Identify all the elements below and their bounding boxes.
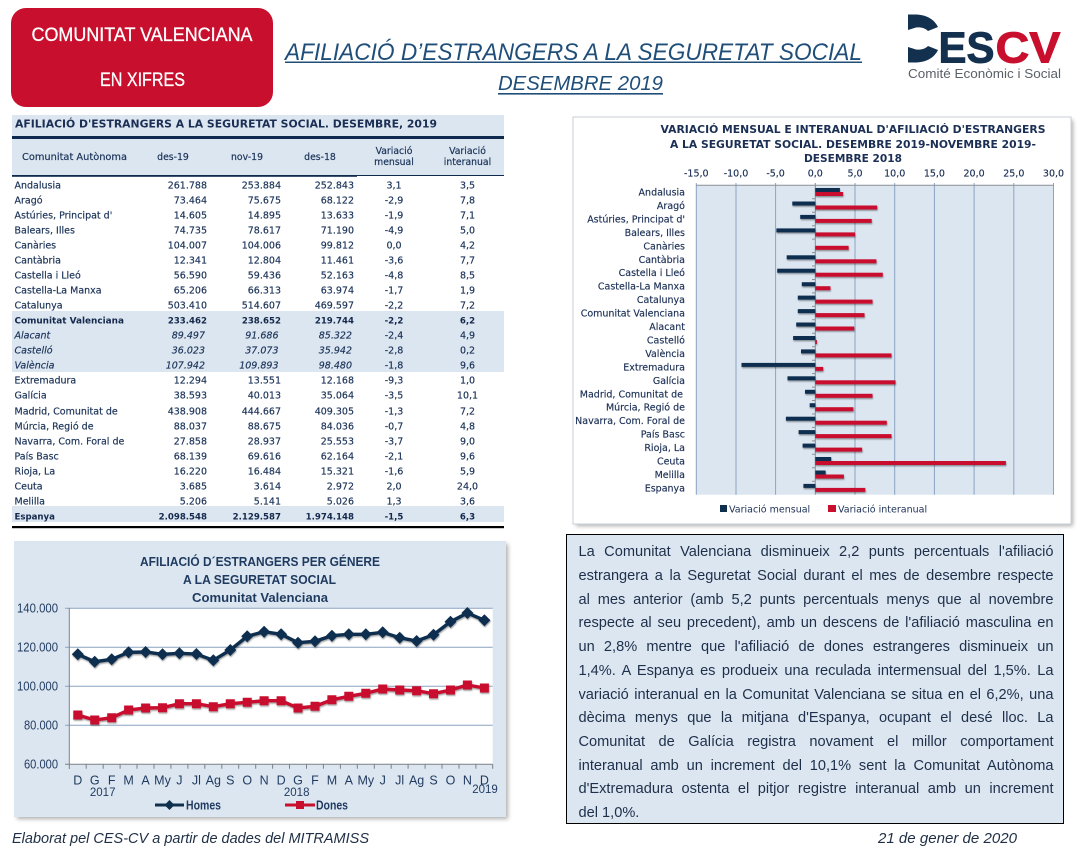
table rows: -2,4 bbox=[385, 330, 403, 342]
bar chart category labels: País Basc bbox=[641, 430, 685, 441]
bar chart title: A LA SEGURETAT SOCIAL. DESEMBRE 2019-NOVEMBRE 2019- bbox=[670, 139, 1036, 151]
line chart y axis labels: 120.000 bbox=[17, 640, 58, 654]
line chart month labels: N bbox=[463, 774, 472, 788]
line chart y axis labels: 60.000 bbox=[24, 758, 58, 772]
table rows: 469.597 bbox=[315, 300, 354, 312]
table rows: 84.036 bbox=[321, 422, 354, 432]
table header: Variació bbox=[376, 146, 413, 157]
table rows: 5,9 bbox=[460, 466, 475, 478]
line chart year labels: 2018 bbox=[284, 787, 309, 799]
table rows: Catalunya bbox=[14, 300, 63, 312]
table rows: -1,6 bbox=[385, 466, 403, 478]
table rows: 2,0 bbox=[386, 482, 402, 492]
line chart legend: Homes bbox=[186, 798, 221, 812]
table rows: 4,8 bbox=[460, 422, 475, 432]
table rows: 7,2 bbox=[460, 300, 475, 312]
table rows: Alacant bbox=[14, 330, 52, 342]
bars: yearly variation bbox=[815, 192, 1006, 492]
logo: CES-CV: CV bbox=[996, 24, 1061, 72]
table rows: 252.843 bbox=[315, 180, 354, 192]
table rows: -2,9 bbox=[385, 196, 403, 206]
table rows: 7,8 bbox=[460, 196, 475, 206]
bar chart legend bbox=[720, 504, 927, 516]
series: Dones bbox=[73, 680, 489, 724]
badge: Comunitat Valenciana en xifres bbox=[11, 8, 273, 107]
bar chart x axis labels: -5,0 bbox=[766, 168, 785, 180]
line chart title: A LA SEGURETAT SOCIAL bbox=[183, 572, 336, 587]
bar chart legend: Variació interanual bbox=[838, 504, 927, 516]
table rows: 37.073 bbox=[245, 346, 278, 356]
table rows: 59.436 bbox=[248, 270, 281, 282]
text block: commentary: estrangera a la Seguretat Social durant el mes de desembre respecte bbox=[578, 568, 1054, 584]
table rows: -2,2 bbox=[385, 300, 403, 312]
text block: commentary: del 1,0%. bbox=[578, 805, 639, 821]
table rows: 3.685 bbox=[180, 482, 207, 492]
table rows: 409.305 bbox=[315, 406, 354, 418]
bar chart x axis labels: 10,0 bbox=[884, 168, 905, 180]
table rows: Comunitat Valenciana bbox=[14, 316, 124, 326]
line chart title: Comunitat Valenciana bbox=[192, 590, 329, 605]
table rows: -3,7 bbox=[385, 436, 403, 448]
bar chart category labels: Espanya bbox=[645, 483, 685, 494]
table rows: -1,5 bbox=[385, 512, 403, 522]
bar chart category labels: Múrcia, Regió de bbox=[606, 403, 685, 414]
table rows: -4,9 bbox=[385, 226, 403, 236]
table rows: 8,5 bbox=[460, 270, 475, 282]
table rows: 38.593 bbox=[174, 390, 207, 402]
table rows: 9,6 bbox=[460, 452, 475, 462]
table rows: 5.026 bbox=[327, 496, 354, 508]
table rows: 35.942 bbox=[319, 346, 352, 356]
table rows: 1,9 bbox=[460, 286, 475, 296]
table rows: 1.974.148 bbox=[306, 512, 354, 522]
table rows: 2.129.587 bbox=[233, 512, 281, 522]
table rows: 6,3 bbox=[460, 512, 475, 522]
line chart month labels: G bbox=[90, 774, 100, 788]
line chart month labels: G bbox=[293, 774, 303, 788]
badge: Comunitat Valenciana en xifres: EN XIFRES bbox=[100, 70, 185, 91]
table rows: Navarra, Com. Foral de bbox=[14, 436, 124, 448]
title bbox=[283, 39, 862, 95]
line chart title bbox=[140, 554, 380, 605]
text block: commentary: d'Extremadura ostenta el pitjor registre interanual amb un increment bbox=[578, 781, 1054, 797]
table rows: 9,0 bbox=[460, 436, 475, 448]
table rows: 438.908 bbox=[168, 406, 207, 418]
line chart y axis labels: 100.000 bbox=[17, 680, 58, 694]
line chart y axis labels: 80.000 bbox=[24, 718, 58, 732]
table rows: 63.974 bbox=[321, 286, 354, 296]
bar chart x axis labels: 5,0 bbox=[847, 168, 863, 180]
table rows: Castella-La Manxa bbox=[14, 286, 102, 296]
series: Homes bbox=[72, 607, 490, 668]
table rows: -2,1 bbox=[385, 452, 403, 462]
table rows: 16.484 bbox=[248, 466, 281, 478]
line chart y axis labels: 140.000 bbox=[17, 602, 58, 616]
table rows: 15.321 bbox=[321, 466, 354, 478]
table header: Variació bbox=[449, 146, 486, 157]
table rows: 7,1 bbox=[460, 210, 475, 222]
table rows: 107.942 bbox=[166, 360, 205, 372]
bar chart category labels: Catalunya bbox=[637, 295, 685, 306]
bar chart category labels: Alacant bbox=[649, 322, 685, 333]
table rows: 36.023 bbox=[172, 346, 205, 356]
bar chart category labels: Castella i Lleó bbox=[619, 268, 685, 279]
bar chart title bbox=[660, 123, 1046, 165]
table rows: 74.735 bbox=[174, 226, 207, 236]
table rows: 104.006 bbox=[242, 240, 281, 252]
footer: date: 21 de gener de 2020 bbox=[877, 830, 1018, 847]
table rows: 68.139 bbox=[174, 452, 207, 462]
bar chart x axis labels: 0,0 bbox=[808, 168, 823, 180]
text block: commentary: interanual amb un increment del 10,1% sent la Comunitat Autònoma bbox=[578, 758, 1054, 774]
line chart month labels: My bbox=[357, 774, 375, 788]
bar chart category labels: Astúries, Principat d' bbox=[587, 214, 685, 225]
table rows: 28.937 bbox=[248, 436, 281, 448]
table rows: -3,6 bbox=[385, 256, 403, 266]
bar chart category labels: València bbox=[645, 349, 685, 360]
table rows: 2.098.548 bbox=[159, 512, 207, 522]
table rows: 66.313 bbox=[248, 286, 281, 296]
table rows: 88.675 bbox=[248, 422, 281, 432]
table rows: 6,2 bbox=[460, 316, 475, 326]
table rows: Castella i Lleó bbox=[14, 270, 81, 282]
table rows: 12.341 bbox=[174, 256, 207, 266]
logo: CES-CV: ES bbox=[938, 24, 994, 72]
bar chart category labels: Andalusia bbox=[639, 188, 685, 198]
table rows: 89.497 bbox=[172, 330, 205, 342]
table rows: 13.551 bbox=[248, 376, 281, 386]
line chart month labels: M bbox=[327, 774, 337, 788]
table rows: 88.037 bbox=[174, 422, 207, 432]
table rows: País Basc bbox=[14, 452, 59, 462]
table rows: 5.206 bbox=[180, 496, 207, 508]
table header: Comunitat Autònoma bbox=[22, 152, 127, 163]
table rows: 2.972 bbox=[327, 482, 354, 492]
panel: line chart by gender bbox=[14, 541, 508, 819]
line chart month labels: S bbox=[226, 774, 234, 788]
bar chart plot area bbox=[696, 183, 1054, 495]
bar chart category labels: Melilla bbox=[655, 470, 685, 481]
line chart month labels: Jl bbox=[395, 774, 404, 788]
bar chart category labels: Navarra, Com. Foral de bbox=[575, 416, 685, 427]
table rows: -0,7 bbox=[385, 422, 403, 432]
table rows: 4,2 bbox=[460, 240, 475, 252]
line chart month labels: J bbox=[176, 774, 183, 788]
table header bbox=[12, 139, 504, 177]
table rows: 25.553 bbox=[321, 436, 354, 448]
bar chart x axis labels: -10,0 bbox=[724, 168, 748, 180]
line chart month labels: J bbox=[380, 774, 386, 788]
table header: interanual bbox=[444, 157, 491, 168]
bar chart category labels: Extremadura bbox=[623, 362, 685, 373]
table rows: 62.164 bbox=[321, 452, 354, 462]
line chart month labels: S bbox=[429, 774, 438, 788]
table rows: 99.812 bbox=[321, 240, 354, 252]
table rows: 1,0 bbox=[460, 376, 475, 386]
table rows: 261.788 bbox=[168, 180, 207, 192]
table rows: 56.590 bbox=[174, 270, 207, 282]
table rows: 91.686 bbox=[245, 330, 278, 342]
table rows: Balears, Illes bbox=[14, 226, 75, 236]
table rows: 0,2 bbox=[460, 346, 475, 356]
table rows: 7,7 bbox=[460, 256, 475, 266]
bar chart category labels: Castella-La Manxa bbox=[598, 282, 685, 293]
line chart y axis labels bbox=[17, 602, 58, 772]
table rows: 4,9 bbox=[460, 330, 475, 342]
table rows: 52.163 bbox=[321, 270, 354, 282]
table rows: 5,0 bbox=[460, 226, 475, 236]
table rows: Aragó bbox=[14, 196, 43, 206]
bar chart category labels: Comunitat Valenciana bbox=[581, 309, 685, 320]
table title: AFILIACIÓ D'ESTRANGERS A LA SEGURETAT SOCIAL. DESEMBRE, 2019 bbox=[15, 118, 437, 130]
table rows: 65.206 bbox=[174, 286, 207, 296]
bar chart category labels: Ceuta bbox=[657, 456, 685, 468]
bar chart category labels: Cantàbria bbox=[639, 255, 685, 266]
line chart month labels: Jl bbox=[192, 774, 201, 788]
title: AFILIACIÓ D’ESTRANGERS A LA SEGURETAT SOCIAL bbox=[283, 39, 862, 66]
table rows: Ceuta bbox=[14, 482, 43, 492]
bar chart x axis labels: 30,0 bbox=[1043, 168, 1064, 180]
logo: CES-CV bbox=[908, 14, 1061, 81]
table rows: 3,6 bbox=[460, 496, 475, 508]
table rows: Galícia bbox=[14, 390, 47, 402]
line chart month labels: Ag bbox=[206, 774, 221, 788]
bar chart title: DESEMBRE 2018 bbox=[804, 153, 902, 165]
line chart month labels: A bbox=[141, 774, 150, 788]
table rows: Múrcia, Regió de bbox=[14, 422, 94, 432]
table rows: 7,2 bbox=[460, 406, 475, 418]
table rows: -3,5 bbox=[385, 390, 403, 402]
line chart month labels: O bbox=[242, 774, 252, 788]
footer: source: Elaborat pel CES-CV a partir de dades del MITRAMISS bbox=[12, 830, 369, 847]
table rows: Cantàbria bbox=[14, 256, 61, 266]
bar chart category labels bbox=[575, 188, 685, 494]
bar chart category labels: Castelló bbox=[647, 336, 685, 346]
table rows: 35.064 bbox=[321, 390, 354, 402]
bar chart legend: Variació mensual bbox=[729, 504, 810, 516]
table rows: 27.858 bbox=[174, 436, 207, 448]
table rows: -1,3 bbox=[385, 406, 403, 418]
table rows: Canàries bbox=[14, 240, 56, 252]
table rows: 40.013 bbox=[248, 390, 281, 402]
line chart month labels: D bbox=[277, 774, 286, 788]
highlight bands bbox=[12, 311, 504, 528]
table rows: Extremadura bbox=[14, 376, 76, 386]
text block: commentary: dècima menys que la mitjana d'Espanya, ocupant el desé lloc. La bbox=[578, 710, 1054, 726]
table rows: 233.462 bbox=[168, 316, 207, 326]
bar chart x axis labels: -15,0 bbox=[684, 168, 709, 180]
table rows: 98.480 bbox=[319, 360, 352, 372]
table header: nov-19 bbox=[231, 152, 263, 163]
table rows: 10,1 bbox=[457, 390, 478, 402]
line chart month labels: My bbox=[154, 774, 172, 788]
table rows: 3,5 bbox=[460, 180, 475, 192]
bar chart title: VARIACIÓ MENSUAL E INTERANUAL D'AFILIACIÓ D'ESTRANGERS bbox=[660, 123, 1046, 136]
bars: monthly variation bbox=[742, 188, 840, 488]
line chart year labels bbox=[90, 784, 498, 799]
table header: des-19 bbox=[157, 152, 189, 163]
table rows: -2,2 bbox=[385, 316, 403, 326]
table rows: Melilla bbox=[14, 496, 45, 508]
table rows: 13.633 bbox=[321, 210, 354, 222]
table rows: 16.220 bbox=[174, 466, 207, 478]
table header: des-18 bbox=[304, 152, 336, 163]
title: DESEMBRE 2019 bbox=[498, 72, 663, 95]
table rows: 85.322 bbox=[319, 330, 352, 342]
table rows: 253.884 bbox=[242, 180, 281, 192]
table rows: -4,8 bbox=[385, 270, 403, 282]
text block: commentary: La Comunitat Valenciana disminueix 2,2 punts percentuals l'afiliació bbox=[578, 544, 1054, 560]
table rows: València bbox=[14, 360, 55, 372]
table rows: 73.464 bbox=[174, 196, 207, 206]
bar chart x axis labels: 20,0 bbox=[964, 168, 985, 180]
line chart year labels: 2017 bbox=[90, 787, 115, 799]
line chart legend: Dones bbox=[316, 798, 348, 812]
table rows: 12.168 bbox=[321, 376, 354, 386]
table rows: 238.652 bbox=[242, 316, 281, 326]
table rows: 11.461 bbox=[321, 256, 354, 266]
table rows: 514.607 bbox=[242, 300, 281, 312]
table rows: Castelló bbox=[14, 346, 53, 356]
bar chart category labels: Madrid, Comunitat de bbox=[580, 389, 683, 400]
table rows: -1,9 bbox=[385, 210, 403, 222]
bar chart category labels: Aragó bbox=[657, 201, 685, 212]
bar chart x axis labels: 15,0 bbox=[924, 168, 945, 180]
line chart title: AFILIACIÓ D´ESTRANGERS PER GÉNERE bbox=[140, 554, 380, 569]
line chart month labels: F bbox=[108, 774, 116, 788]
line chart month labels: M bbox=[123, 774, 134, 788]
badge: Comunitat Valenciana en xifres: COMUNITAT VALENCIANA bbox=[32, 25, 253, 46]
text block: commentary: variació interanual en la Comunitat Valenciana se situa en el 6,2%, una bbox=[578, 687, 1054, 703]
text block: commentary: Comunitat de Galícia registra novament el millor comportament bbox=[578, 734, 1054, 750]
table rows: 14.605 bbox=[174, 210, 207, 222]
line chart month labels: A bbox=[345, 774, 354, 788]
table rows: -1,7 bbox=[385, 286, 403, 296]
table rows: 71.190 bbox=[321, 226, 354, 236]
bar chart category labels: Rioja, La bbox=[644, 443, 685, 454]
table rows: 3.614 bbox=[254, 482, 281, 492]
text block: commentary: 1,4%. A Espanya es produeix una reculada intermensual del 1,5%. La bbox=[578, 663, 1054, 679]
table rows: 78.617 bbox=[248, 226, 281, 236]
line chart month labels: O bbox=[446, 774, 456, 788]
line chart year labels: 2019 bbox=[472, 784, 498, 796]
line chart month labels: F bbox=[311, 774, 319, 788]
text block: commentary: un 2,8% mentre que l'afiliació de dones estrangeres disminueix un bbox=[578, 639, 1054, 655]
text block: commentary bbox=[566, 534, 1064, 824]
table rows: 12.804 bbox=[248, 256, 281, 266]
table rows: 5.141 bbox=[254, 496, 281, 508]
line chart plot area bbox=[65, 608, 493, 769]
line chart month labels: D bbox=[73, 774, 82, 788]
table rows: 3,1 bbox=[386, 180, 402, 192]
table rows: -1,8 bbox=[385, 360, 403, 372]
bar chart category labels: Balears, Illes bbox=[625, 228, 685, 239]
table rows: Andalusia bbox=[14, 180, 61, 192]
table rows: Madrid, Comunitat de bbox=[14, 406, 118, 418]
table rows: -9,3 bbox=[385, 376, 403, 386]
table rows: Astúries, Principat d' bbox=[14, 210, 112, 222]
table rows: 12.294 bbox=[174, 376, 207, 386]
line chart legend bbox=[155, 798, 348, 812]
text block: commentary: respecte al seu precedent), amb un descens de l'afiliació masculina en bbox=[578, 615, 1054, 631]
table header: mensual bbox=[374, 157, 414, 168]
text block: commentary: al mes anterior (amb 5,2 punts percentuals menys que al novembre bbox=[578, 592, 1054, 608]
table rows: 444.667 bbox=[242, 406, 281, 418]
table rows: 68.122 bbox=[321, 196, 354, 206]
line chart month labels: D bbox=[480, 774, 489, 788]
bar chart category labels: Galícia bbox=[653, 376, 685, 387]
table rows: 1,3 bbox=[386, 496, 402, 508]
table rows: 24,0 bbox=[457, 482, 478, 492]
line chart month labels bbox=[73, 774, 489, 788]
table rows: 104.007 bbox=[168, 240, 207, 252]
table rows: 75.675 bbox=[248, 196, 281, 206]
line chart month labels: N bbox=[260, 774, 269, 788]
table rows: 9,6 bbox=[460, 360, 475, 372]
table rows: 219.744 bbox=[315, 316, 354, 326]
table rows: -2,8 bbox=[385, 346, 403, 356]
bar chart x axis labels bbox=[684, 168, 1064, 180]
bar chart category labels: Canàries bbox=[643, 241, 685, 252]
table rows: 109.893 bbox=[239, 360, 278, 372]
table: affiliation by region bbox=[12, 115, 504, 528]
table title bbox=[12, 115, 504, 139]
table rows bbox=[14, 180, 478, 522]
line chart month labels: Ag bbox=[409, 774, 424, 788]
table rows: Espanya bbox=[14, 512, 55, 522]
table rows: 69.616 bbox=[248, 452, 281, 462]
table rows: 503.410 bbox=[168, 300, 207, 312]
table rows: 14.895 bbox=[248, 210, 281, 222]
table rows: 0,0 bbox=[386, 240, 402, 252]
panel: monthly and yearly variation bar chart bbox=[573, 117, 1073, 526]
logo: CES-CV: Comité Econòmic i Social bbox=[908, 66, 1061, 81]
table rows: Rioja, La bbox=[14, 466, 55, 478]
bar chart x axis labels: 25,0 bbox=[1003, 168, 1024, 180]
